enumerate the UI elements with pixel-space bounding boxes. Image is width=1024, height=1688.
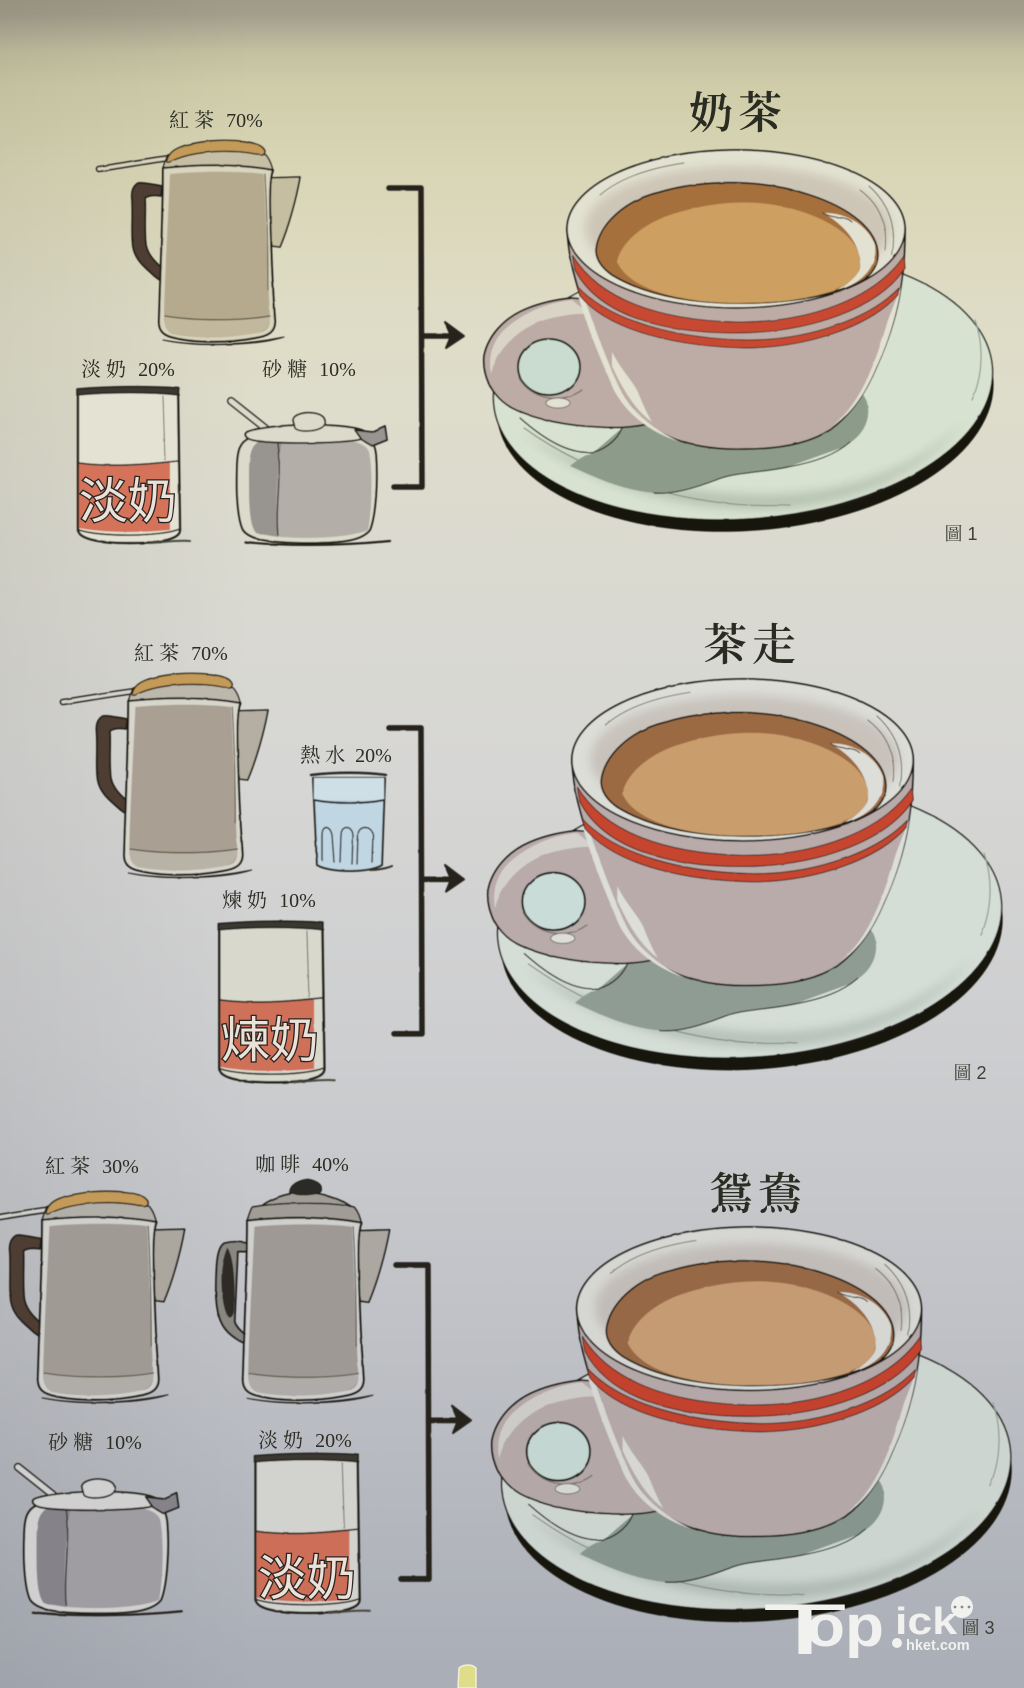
icon: evaporated milk can xyxy=(77,387,190,543)
title: milk tea: 奶茶 xyxy=(689,89,787,138)
illustration: cha zau cup xyxy=(488,679,1012,1087)
illustration: yuenyeung cup xyxy=(492,1227,1021,1639)
logo: Topick hket.com: T xyxy=(762,1590,848,1670)
panel: milk tea xyxy=(77,89,1003,548)
figure number 3: 圖 3 xyxy=(961,1618,995,1638)
title: cha zau: 茶走 xyxy=(703,621,801,670)
icon: tea pot xyxy=(63,673,268,878)
panel: yuenyeung xyxy=(0,1153,1021,1639)
title: yuenyeung: 鴛鴦 xyxy=(709,1170,807,1219)
icon: evaporated milk can: 淡奶 xyxy=(258,1552,356,1606)
icon: evaporated milk can: 淡奶 xyxy=(79,475,177,529)
icon: sugar pot xyxy=(18,1467,182,1615)
illustration: milk tea cup xyxy=(484,150,1003,548)
label: sugar 10%: 砂 糖 10% xyxy=(48,1431,142,1454)
label: evaporated milk 20%: 淡 奶 20% xyxy=(81,358,175,381)
arrow bracket xyxy=(389,188,464,487)
icon: condensed milk can: 煉奶 xyxy=(221,1014,319,1068)
label: black tea 30%: 紅 茶 30% xyxy=(45,1155,139,1178)
icon: glass of water xyxy=(311,773,392,871)
label: coffee 40%: 咖 啡 40% xyxy=(255,1153,349,1176)
arrow bracket xyxy=(389,728,464,1034)
logo: Topick hket.com: op xyxy=(806,1594,884,1659)
icon: tea pot xyxy=(99,140,300,345)
label: evaporated milk 20%: 淡 奶 20% xyxy=(258,1429,352,1452)
panel: cha zau xyxy=(63,621,1012,1087)
logo: Topick hket.com: ick xyxy=(895,1601,958,1643)
label: hot water 20%: 熱 水 20% xyxy=(300,744,392,767)
figure number 2: 圖 2 xyxy=(953,1063,987,1083)
icon: condensed milk can xyxy=(218,921,335,1082)
logo: Topick hket.com: hket.com xyxy=(906,1638,970,1654)
icon: tea pot xyxy=(0,1191,185,1403)
label: black tea 70%: 紅 茶 70% xyxy=(169,109,263,132)
logo: Topick hket.com xyxy=(762,1590,973,1670)
icon: coffee pot xyxy=(216,1179,390,1403)
decorative straw at bottom xyxy=(458,1665,476,1688)
figure number 1: 圖 1 xyxy=(944,524,978,544)
label: black tea 70%: 紅 茶 70% xyxy=(134,642,228,665)
icon: evaporated milk can xyxy=(255,1453,370,1613)
arrow bracket xyxy=(396,1265,471,1579)
label: condensed milk 10%: 煉 奶 10% xyxy=(222,889,316,912)
icon: sugar pot xyxy=(231,401,390,545)
label: sugar 10%: 砂 糖 10% xyxy=(262,358,356,381)
